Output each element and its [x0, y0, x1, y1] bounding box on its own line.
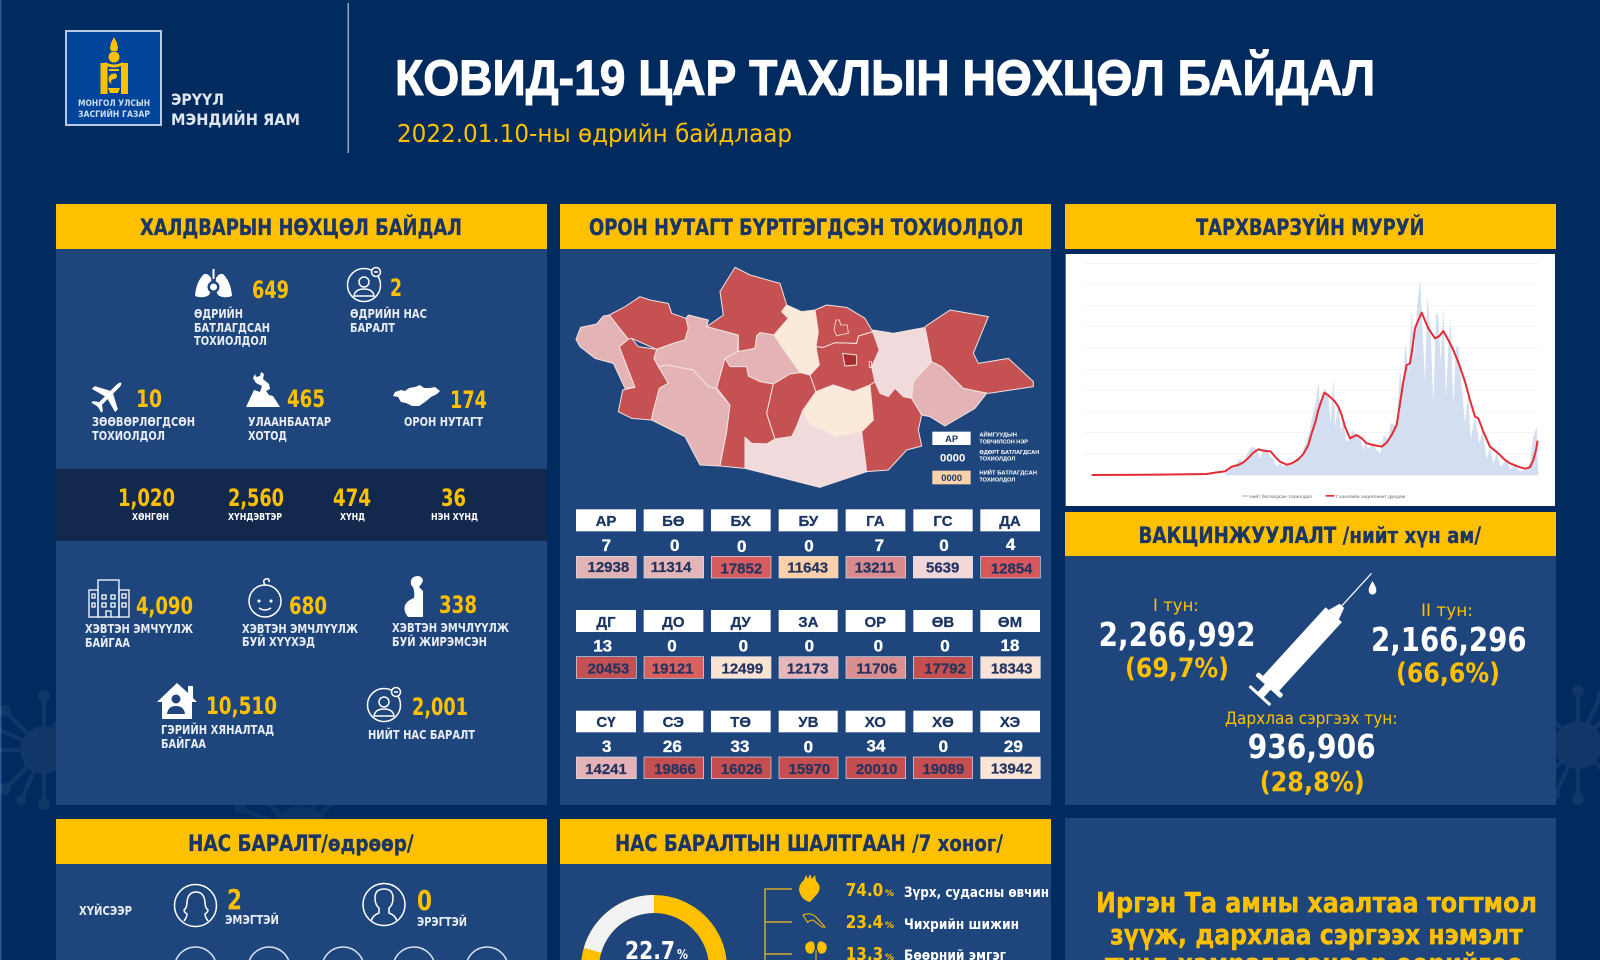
province table: СЭ [663, 714, 684, 731]
ministry name [171, 90, 300, 129]
severity strip: 2,560 [228, 484, 284, 512]
chart legend: 7 хоногийн хөдөлгөөнт дундаж [1335, 493, 1406, 499]
map legend: ӨДӨРТ БАТЛАГДСАН [979, 450, 1040, 456]
province table: 19866 [654, 761, 696, 778]
province table: 33 [731, 737, 749, 756]
booster dose: (28,8%) [1260, 767, 1365, 798]
province table: 12499 [721, 660, 763, 677]
province table: 12938 [587, 559, 629, 576]
map legend: 0000 [941, 473, 962, 483]
stat: imported [92, 385, 195, 443]
province table: 16026 [721, 761, 763, 778]
stat: daily confirmed: 649 [252, 276, 289, 304]
stat: Ulaanbaatar: УЛААНБААТАР [248, 414, 331, 429]
dose 2: 2,166,296 [1371, 620, 1527, 659]
heading: deaths by day: НАС БАРАЛТ/өдрөөр/ [188, 832, 414, 857]
ministry name: МЭНДИЙН ЯАМ [171, 110, 300, 129]
province table: 26 [663, 737, 682, 756]
stat: home monitored [161, 692, 277, 751]
province table: 11643 [787, 560, 828, 577]
icon: plane [85, 371, 133, 419]
heading: causes of death: НАС БАРАЛТЫН ШАЛТГААН /7 хоног/ [615, 832, 1004, 857]
province table: 0 [739, 637, 748, 656]
icon: kidneys [806, 942, 826, 960]
province table: 13942 [991, 761, 1032, 778]
severity strip: 36 [441, 484, 466, 512]
stat: pregnant: 338 [439, 591, 477, 619]
panel: epidemic curve [1065, 204, 1556, 506]
map legend: ТОХИОЛДОЛ [979, 478, 1016, 484]
icon: daily death [348, 268, 380, 302]
province table: 12173 [787, 660, 829, 677]
stat: daily confirmed: ТОХИОЛДОЛ [194, 333, 267, 348]
map legend: 0000 [940, 452, 965, 464]
panel: infection situation [56, 204, 547, 805]
stat: daily confirmed: ӨДРИЙН [194, 306, 243, 321]
province table: 0 [804, 737, 813, 756]
panel: deaths by day [56, 819, 547, 960]
stat: female: 2 [227, 883, 242, 916]
province table: 18343 [991, 660, 1032, 677]
stat: children: ХЭВТЭН ЭМЧЛҮҮЛЖ [242, 621, 359, 636]
heading: vaccination: ВАКЦИНЖУУЛАЛТ /нийт хүн ам/ [1138, 524, 1482, 549]
severity strip: ХӨНГӨН [132, 512, 169, 523]
dose 1: (69,7%) [1125, 653, 1229, 684]
map legend: ТОВЧИЛСОН НЭР [979, 439, 1029, 445]
dose 2 [1371, 601, 1527, 689]
dose 2: II тун: [1421, 601, 1473, 621]
title: КОВИД-19 ЦАР ТАХЛЫН НӨХЦӨЛ БАЙДАЛ [395, 49, 1375, 106]
dose 1: 2,266,992 [1099, 615, 1256, 654]
province table: ГА [866, 513, 885, 530]
icon: hospital [89, 580, 129, 617]
province table: 13211 [855, 560, 895, 577]
heading: epidemic curve: ТАРХВАРЗҮЙН МУРУЙ [1196, 215, 1424, 241]
severity strip: НЭН ХҮНД [431, 512, 478, 523]
icon: home [157, 683, 197, 719]
province table: 0 [804, 537, 814, 556]
map legend: ТОХИОЛДОЛ [979, 457, 1016, 463]
severity strip: ХҮНД [340, 512, 365, 523]
province table: 0 [939, 536, 949, 555]
province table: ТӨ [730, 714, 751, 731]
stat: countryside [404, 386, 487, 429]
province table: 5639 [926, 559, 959, 576]
province table: ӨМ [998, 614, 1022, 631]
icon: statue [246, 372, 280, 407]
stat: Ulaanbaatar: ХОТОД [248, 428, 287, 443]
donut chart [584, 895, 718, 960]
stat: total deaths [368, 693, 475, 742]
stat: male: ЭРЭГТЭЙ [417, 914, 467, 929]
line chart [1066, 254, 1555, 506]
province table: 0 [667, 637, 677, 656]
province table: БХ [730, 513, 751, 530]
province table: 0 [874, 636, 883, 655]
label: by sex: ХҮЙСЭЭР [79, 903, 132, 918]
province table: ГС [933, 513, 953, 530]
province table: 0 [737, 537, 746, 556]
province table: 17792 [924, 660, 966, 677]
icon: female [174, 884, 216, 926]
province table: 11314 [651, 559, 692, 576]
stat: female: ЭМЭГТЭЙ [225, 912, 279, 927]
stat: daily deaths [350, 274, 427, 335]
stat: hospitalized [85, 592, 194, 650]
province table: 0 [939, 737, 948, 756]
stat: male: 0 [417, 884, 432, 917]
stat: total deaths: НИЙТ НАС БАРАЛТ [368, 727, 475, 742]
icon: baby [249, 579, 281, 617]
province table: 14241 [585, 761, 627, 778]
province table: ХЭ [1000, 714, 1020, 731]
logo: government emblem: МОНГОЛ УЛСЫН [78, 99, 150, 109]
stat: male [417, 884, 467, 929]
booster dose: Дархлаа сэргээх тун: [1225, 709, 1398, 729]
province table: БӨ [662, 513, 685, 530]
stat: pregnant: БУЙ ЖИРЭМСЭН [392, 634, 487, 649]
bracket lines [765, 889, 792, 960]
province table: 20453 [587, 660, 629, 677]
stat: imported: 10 [136, 385, 162, 413]
icon: heart [799, 874, 820, 902]
province table: 19089 [922, 761, 964, 778]
cause: heart: Зүрх, судасны өвчин [904, 885, 1049, 901]
panel: public message: Иргэн Та амны хаалтаа тогтмол [1096, 886, 1537, 919]
icon: lungs [195, 269, 232, 297]
province table: 4 [1006, 535, 1016, 554]
province table: 0 [805, 637, 814, 656]
heading: infection situation: ХАЛДВАРЫН НӨХЦӨЛ БАЙДАЛ [140, 215, 462, 241]
cause: kidney [846, 944, 1006, 960]
province table: АР [596, 513, 616, 530]
stat: daily deaths: ӨДРИЙН НАС [350, 306, 427, 321]
stat: female [225, 883, 279, 927]
province table: 15970 [788, 761, 830, 778]
stat: daily deaths: 2 [390, 274, 402, 302]
province table: 7 [602, 536, 611, 555]
stat: home monitored: 10,510 [206, 692, 277, 720]
cause: diabetes: % [885, 921, 894, 931]
panel: causes of death [560, 819, 1051, 960]
panel: public message: зүүж, дархлаа сэргээх нэмэлт [1110, 918, 1524, 951]
severity strip [56, 469, 547, 541]
stat: home monitored: БАЙГАА [161, 736, 206, 751]
icon: Mongolia silhouette [393, 385, 440, 406]
stat: imported: ТОХИОЛДОЛ [92, 428, 165, 443]
subtitle date: 2022.01.10-ны өдрийн байдлаар [397, 119, 792, 148]
stat: hospitalized: 4,090 [136, 592, 193, 620]
map legend: НИЙТ БАТЛАГДСАН [979, 468, 1037, 476]
stat: children [242, 592, 359, 649]
panel: vaccination [1065, 512, 1556, 805]
province table: 18 [1001, 636, 1019, 655]
stat: pregnant: ХЭВТЭН ЭМЧЛҮҮЛЖ [392, 620, 510, 635]
province table [576, 509, 1040, 779]
province table: 11706 [856, 661, 897, 678]
stat: imported: ЗӨӨВӨРЛӨГДСӨН [92, 414, 195, 429]
dose 2: (66,6%) [1396, 658, 1500, 689]
province table: 29 [1004, 737, 1023, 756]
stat: Ulaanbaatar [248, 385, 331, 443]
icon: pregnant woman [404, 576, 423, 617]
panel: local cases [560, 204, 1051, 805]
chart legend [1242, 493, 1406, 499]
icon: total death [368, 688, 400, 722]
stat: children: БУЙ ХҮҮХЭД [242, 634, 315, 649]
age group icons [174, 947, 508, 960]
map legend: АР [945, 434, 958, 444]
province table: 0 [940, 637, 950, 656]
province table: 0 [670, 536, 679, 555]
cause: diabetes: 23.4 [846, 912, 883, 933]
booster dose [1225, 709, 1398, 798]
province table: ДГ [596, 614, 616, 631]
stat: home monitored: ГЭРИЙН ХЯНАЛТАД [161, 722, 274, 737]
province table: 7 [875, 536, 884, 555]
icon: syringe [1246, 562, 1384, 708]
province table: БУ [798, 513, 819, 530]
province table: ДУ [731, 614, 751, 631]
province table: ХО [865, 714, 886, 731]
dose 1 [1099, 596, 1256, 684]
cause: heart: 74.0 [846, 880, 883, 901]
province table: 13 [593, 637, 612, 656]
province table: 19121 [652, 660, 694, 677]
stat: daily deaths: БАРАЛТ [350, 320, 395, 335]
severity strip: 1,020 [118, 484, 175, 512]
logo: government emblem: ЗАСГИЙН ГАЗАР [78, 108, 150, 120]
icon: drop [1369, 581, 1376, 595]
map legend [932, 431, 1040, 484]
province table: ЗА [798, 614, 819, 631]
heading: local cases: ОРОН НУТАГТ БҮРТГЭГДСЭН ТОХИОЛДОЛ [589, 216, 1024, 241]
province table: ДО [662, 614, 685, 631]
stat: daily confirmed [194, 276, 289, 348]
province table: ХӨ [932, 714, 954, 731]
icon: pancreas [803, 914, 825, 927]
province table: УВ [798, 714, 819, 731]
map legend: АЙМГУУДЫН [979, 431, 1017, 439]
booster dose: 936,906 [1248, 727, 1376, 766]
stat: total deaths: 2,001 [412, 693, 468, 721]
dose 1: I тун: [1153, 596, 1199, 616]
province table: 12854 [991, 560, 1033, 577]
stat: hospitalized: БАЙГАА [85, 635, 130, 650]
province table: ӨВ [932, 614, 954, 631]
severity strip: ХҮНДЭВТЭР [228, 512, 282, 523]
ministry name: ЭРҮҮЛ [171, 90, 224, 109]
stat: pregnant [392, 591, 510, 649]
province table: 17852 [720, 560, 762, 577]
panel: public message [1065, 818, 1556, 960]
stat: hospitalized: ХЭВТЭН ЭМЧҮҮЛЖ [85, 621, 194, 636]
cause: diabetes [846, 912, 1019, 933]
stat: countryside: ОРОН НУТАГТ [404, 414, 483, 429]
logo: government emblem [66, 31, 161, 125]
cause: heart [846, 880, 1049, 901]
chart legend: нийт батлагдсан тохиолдол [1250, 493, 1312, 499]
stat: Ulaanbaatar: 465 [287, 385, 325, 413]
cause: diabetes: Чихрийн шижин [904, 917, 1019, 933]
map of Mongolia [576, 267, 1040, 487]
province table: 34 [867, 737, 886, 756]
province table: 20010 [856, 761, 897, 778]
stat: countryside: 174 [450, 386, 487, 414]
province table: ОР [865, 614, 886, 631]
severity strip: 474 [333, 484, 371, 512]
province table: ДА [999, 513, 1021, 530]
cause: heart: % [885, 889, 894, 899]
icon: male [363, 884, 405, 926]
province table: СҮ [596, 714, 616, 731]
stat: daily confirmed: БАТЛАГДСАН [194, 320, 270, 335]
province table: 3 [602, 737, 611, 756]
stat: children: 680 [289, 592, 327, 620]
